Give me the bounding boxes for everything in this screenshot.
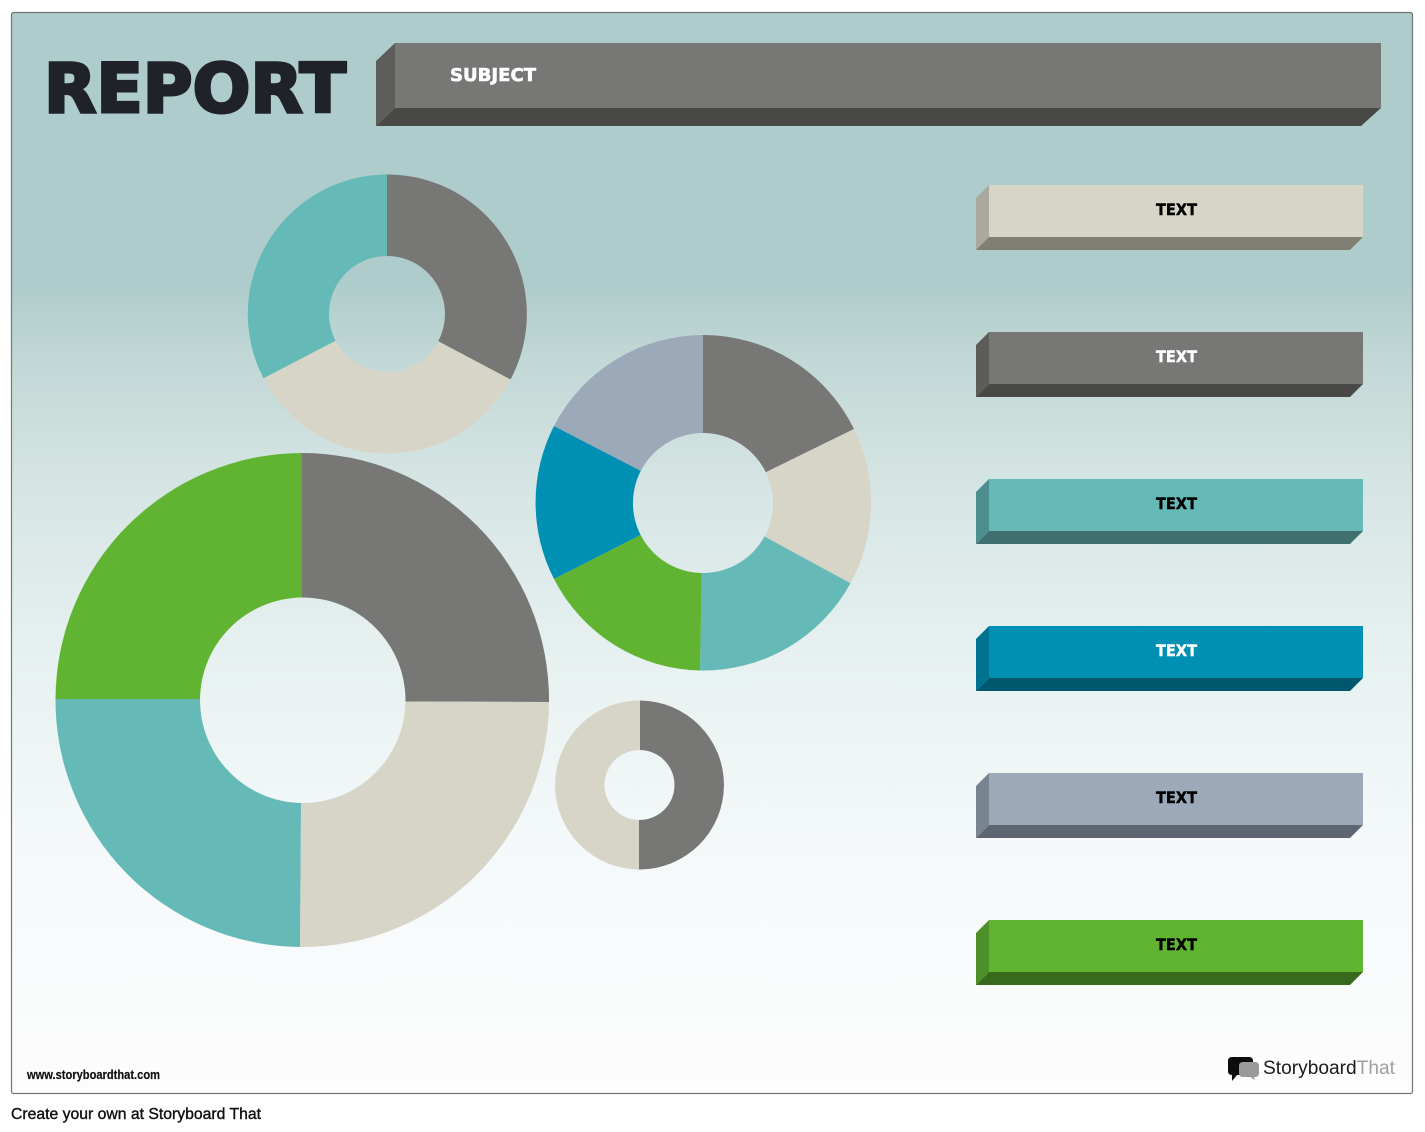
subject bar [376,43,1381,126]
title: REPORT [44,50,347,129]
legend bar: green: TEXT [1156,935,1197,954]
legend bar: slate: TEXT [1156,788,1197,807]
legend bar: teal: TEXT [1156,494,1197,513]
logo wordmark: StoryboardThat [1263,1058,1396,1079]
donut chart: middle six segments [536,335,871,671]
logo: Storyboard That [1228,1057,1396,1081]
legend bar: green [976,920,1363,985]
subject label: SUBJECT [450,65,537,86]
donut chart: top three segments [248,174,527,454]
donut chart: large four segments [55,453,549,947]
legend bar: slate [976,773,1363,838]
legend bar: gray: TEXT [1156,347,1197,366]
legend bar: gray [976,332,1363,397]
icon: speech bubbles [1228,1057,1259,1081]
legend bar: beige: TEXT [1156,200,1197,219]
legend bar: beige [976,185,1363,250]
footer caption: Create your own at Storyboard That [11,1106,262,1123]
legend bar: teal [976,479,1363,544]
legend bar: blue: TEXT [1156,641,1197,660]
website url: www.storyboardthat.com [26,1068,160,1082]
legend bar: blue [976,626,1363,691]
donut chart: small two segments [555,700,724,870]
